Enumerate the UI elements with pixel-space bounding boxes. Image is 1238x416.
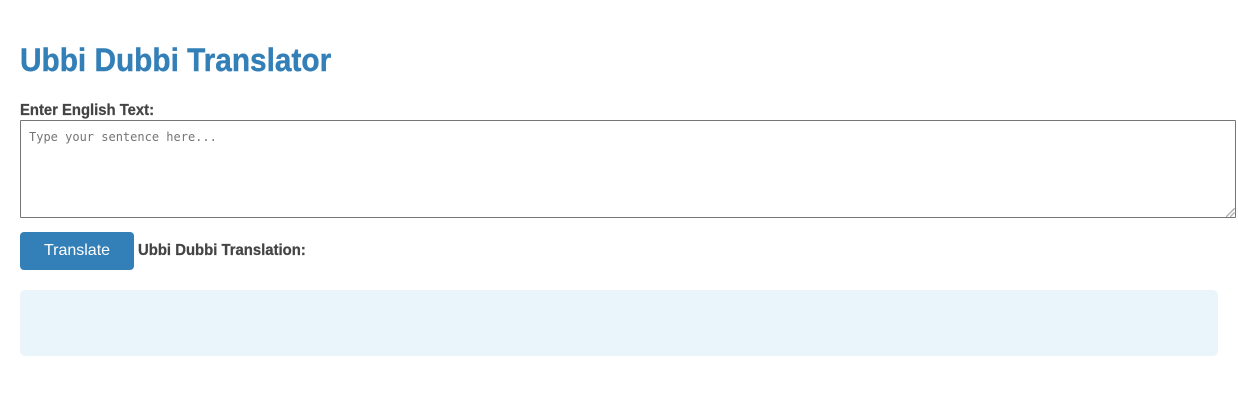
placeholder text: Type your sentence here... [29, 130, 217, 144]
text input box [20, 120, 1236, 218]
translate button [20, 232, 134, 270]
output label: Ubbi Dubbi Translation: [138, 242, 306, 259]
input label: Enter English Text: [20, 102, 154, 119]
title: Ubbi Dubbi Translator [20, 42, 331, 78]
icon: resize handle [1226, 208, 1235, 217]
output panel [20, 290, 1218, 356]
translate button: Translate [44, 242, 110, 259]
